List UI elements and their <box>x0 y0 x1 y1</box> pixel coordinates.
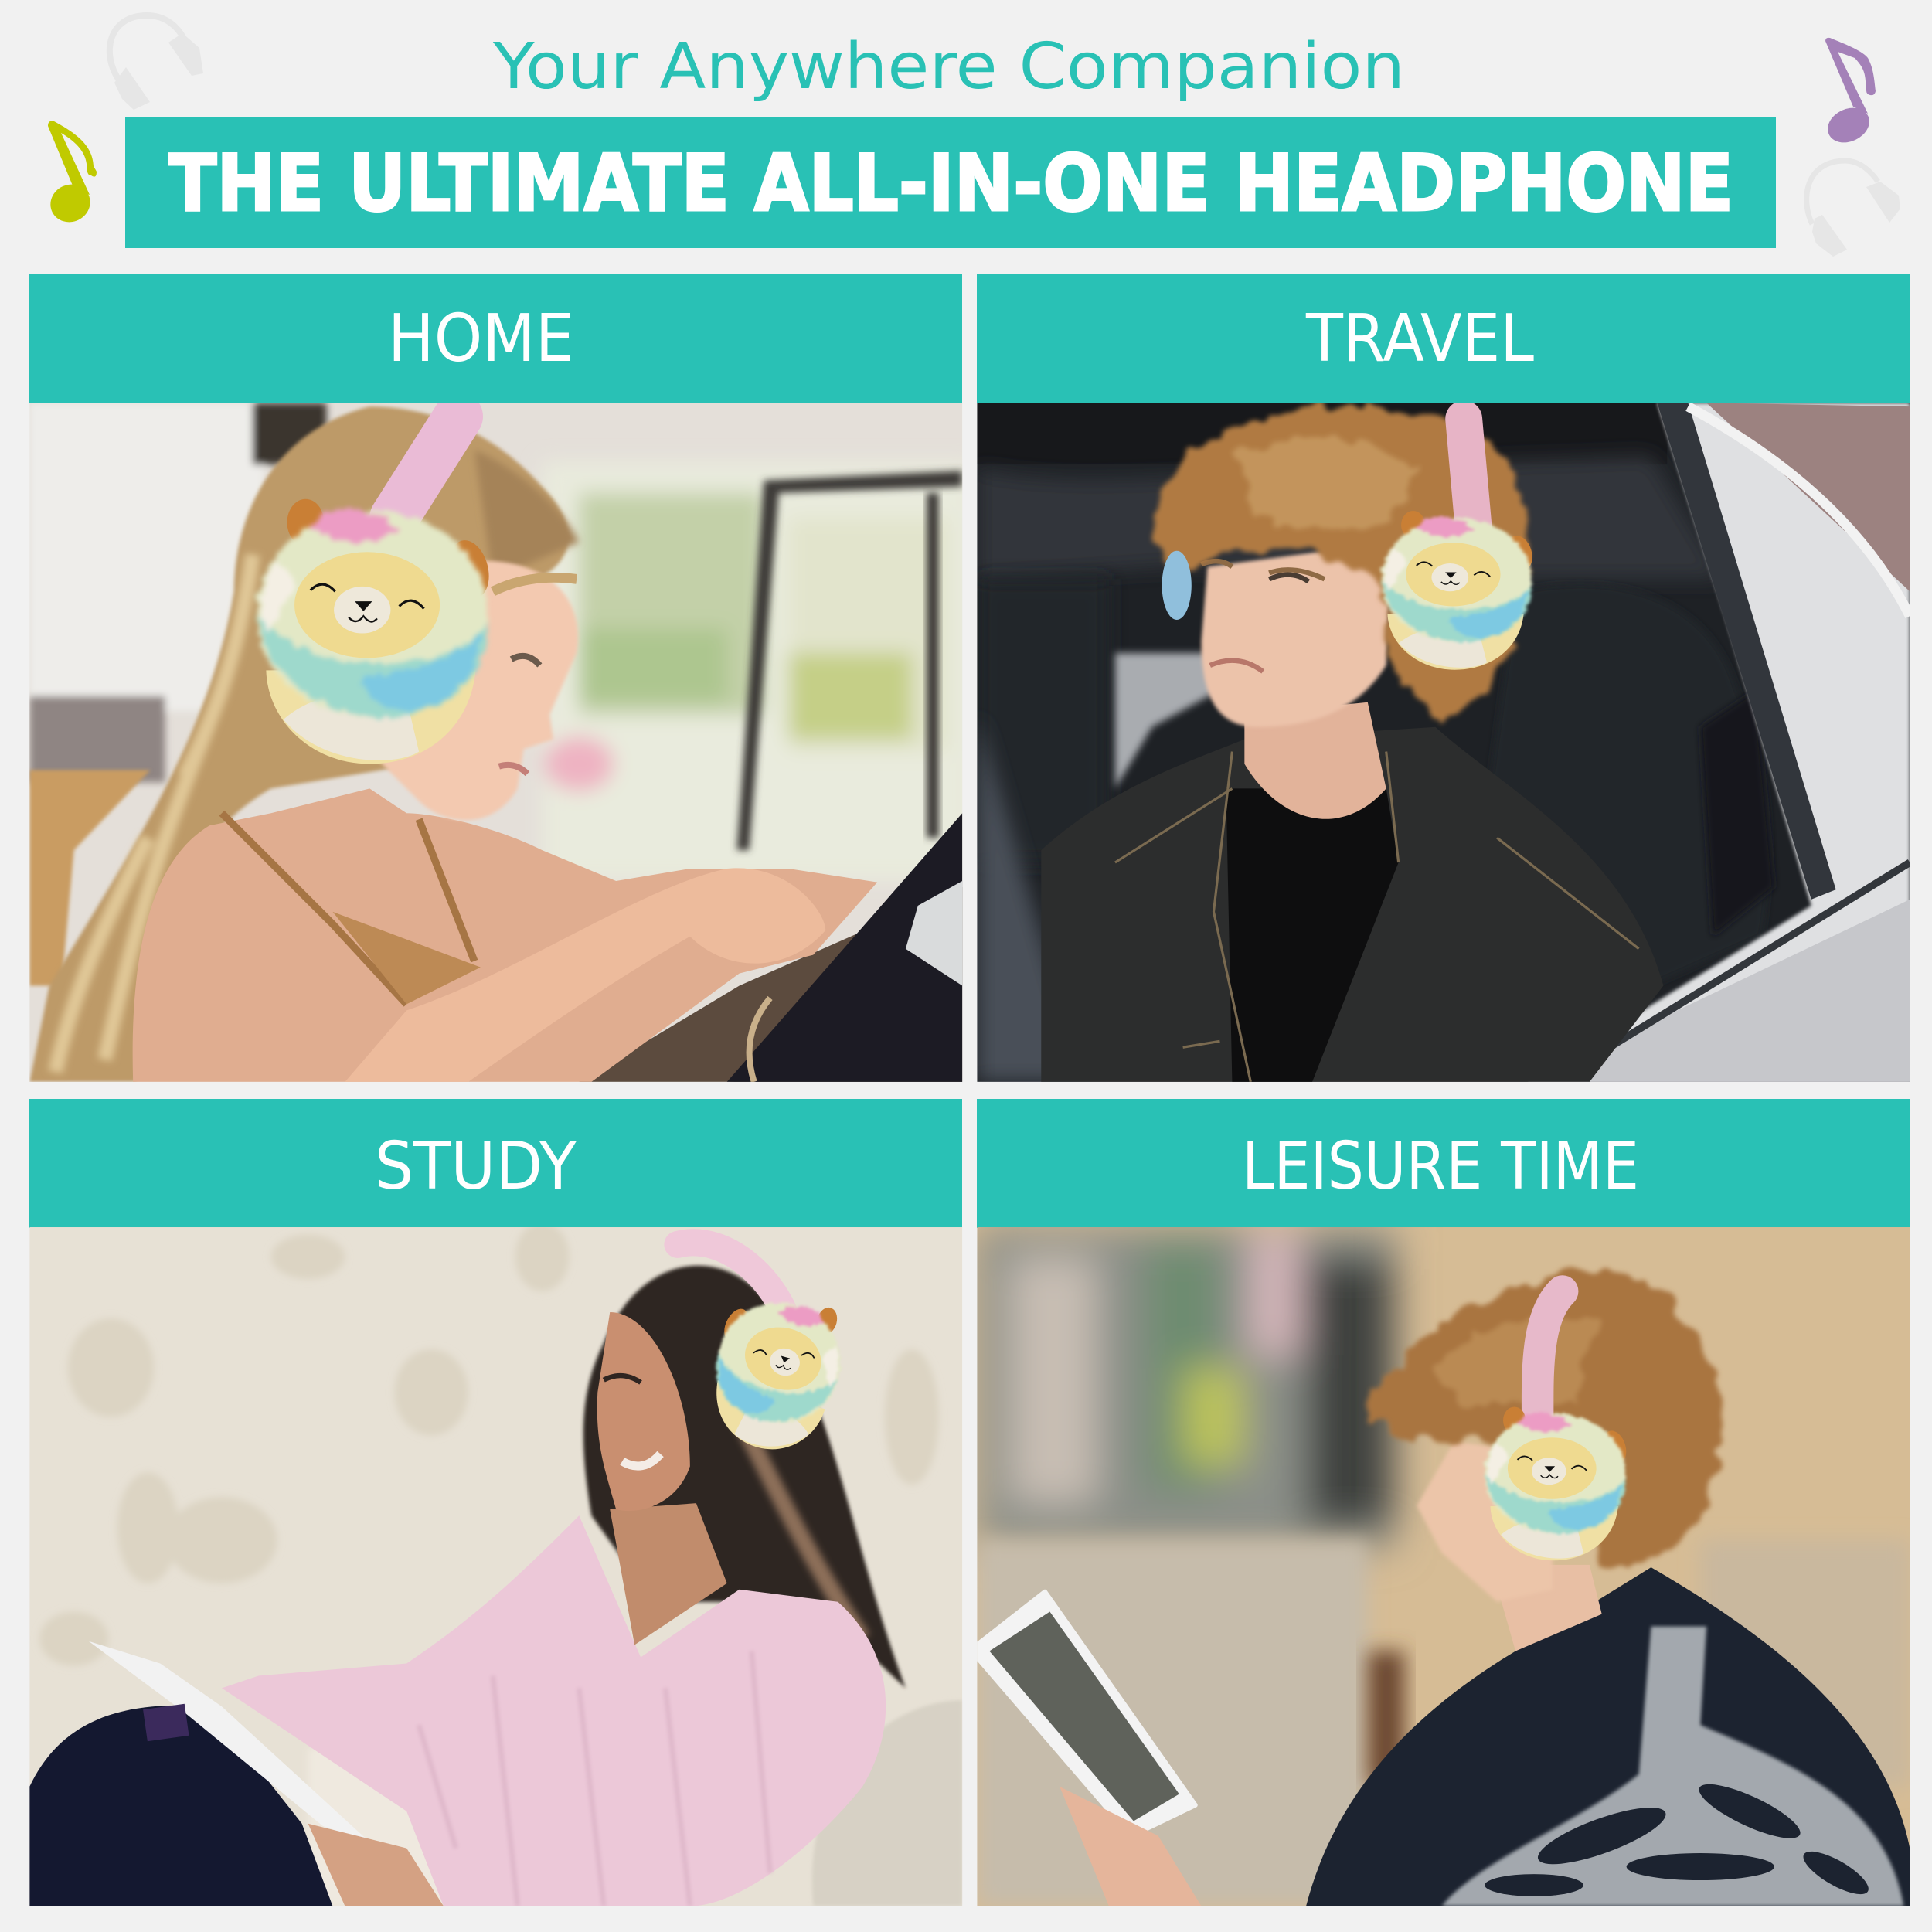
body <box>133 788 877 1082</box>
book <box>89 1641 369 1842</box>
headband <box>1538 1291 1563 1435</box>
hair <box>1151 406 1528 725</box>
neck and face <box>610 1503 727 1645</box>
hand <box>1060 1787 1202 1906</box>
photo: girl reading a book <box>29 1223 962 1906</box>
face features <box>1202 561 1325 672</box>
jacket <box>1306 1567 1910 1906</box>
face features <box>604 1376 661 1466</box>
icon: faint headphones top left <box>110 15 203 110</box>
heading: leisure time <box>977 1099 1910 1228</box>
heading: home <box>29 274 962 403</box>
subtitle: Your Anywhere Companion <box>492 30 1405 104</box>
table <box>579 887 962 1082</box>
panel: study <box>29 1099 962 1906</box>
jeans <box>29 1706 332 1906</box>
icon: purple music note <box>1822 38 1876 149</box>
headband <box>678 1243 788 1325</box>
face <box>357 560 578 820</box>
hair back <box>29 406 568 1082</box>
neck <box>1244 702 1386 819</box>
panel: travel <box>977 274 1910 1082</box>
panel: leisure time <box>977 1099 1910 1906</box>
sweater <box>222 1515 886 1906</box>
tablet <box>977 1592 1196 1836</box>
skeleton print <box>1441 1627 1903 1906</box>
heading: travel: TRAVEL <box>1305 301 1534 377</box>
headband <box>1464 419 1474 530</box>
jacket <box>1041 727 1663 1082</box>
lion earphone <box>1485 1406 1630 1560</box>
heading: home: HOME <box>388 301 574 377</box>
heading: leisure time: LEISURE TIME <box>1242 1128 1639 1205</box>
hair <box>583 1266 906 1688</box>
photo: teen in car <box>977 403 1910 1082</box>
sofa <box>308 1700 493 1906</box>
hand <box>308 1824 444 1906</box>
lion earphone <box>694 1282 855 1463</box>
photo: girl with tablet at home <box>29 403 974 1084</box>
face <box>1202 543 1393 727</box>
heading: study <box>29 1099 962 1228</box>
arm <box>345 868 825 1082</box>
neck <box>1491 1565 1602 1651</box>
face features <box>493 577 577 774</box>
title banner <box>125 117 1776 248</box>
headband <box>394 417 458 518</box>
heading: study: STUDY <box>375 1128 577 1205</box>
lion earphone <box>257 499 495 764</box>
icon: yellow-green music note <box>44 121 97 229</box>
photo: teen with tablet <box>977 1227 1910 1906</box>
panel: home <box>29 274 974 1084</box>
heading: travel <box>977 274 1910 403</box>
icon: faint headphones top right <box>1807 161 1900 257</box>
face <box>1417 1441 1553 1602</box>
hair <box>1368 1267 1722 1575</box>
car door <box>1528 403 1910 1082</box>
title: THE ULTIMATE ALL-IN-ONE HEADPHONE <box>168 138 1733 229</box>
lion earphone <box>1381 511 1536 670</box>
